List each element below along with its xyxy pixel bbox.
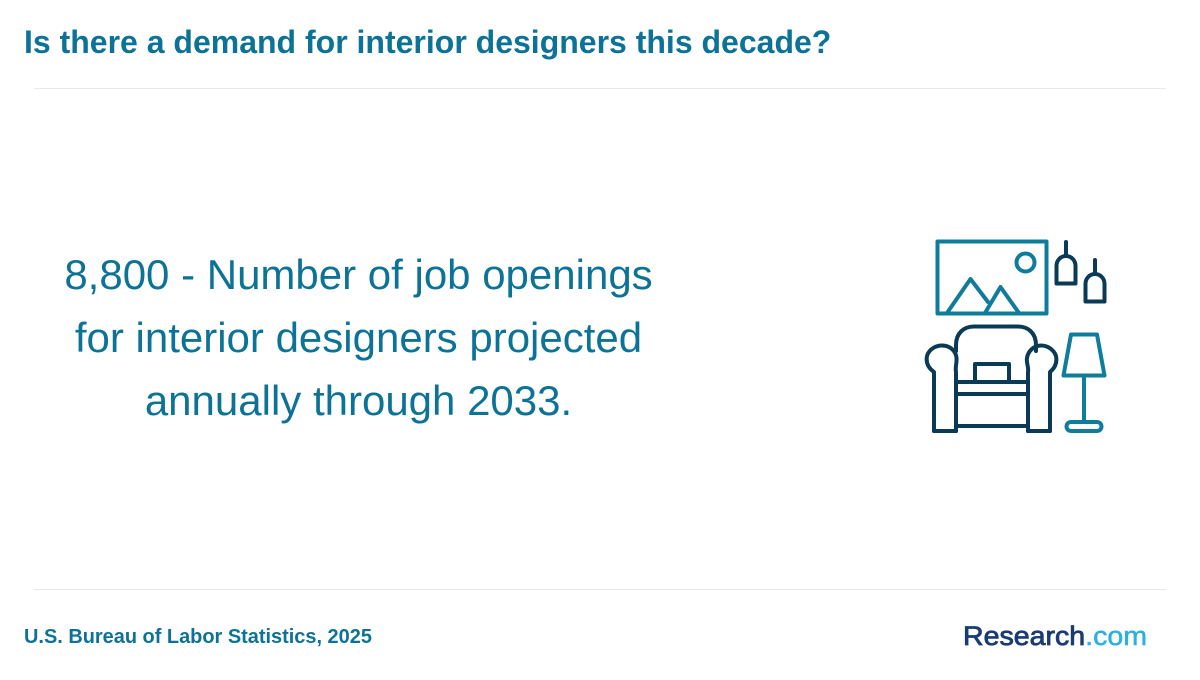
icon: floor lamp [1064, 334, 1104, 431]
source note: U.S. Bureau of Labor Statistics, 2025 [24, 626, 372, 648]
main statistic text: annually through 2033. [145, 377, 572, 424]
main statistic text [64, 251, 653, 424]
icon: armchair [927, 326, 1056, 431]
main statistic text: for interior designers projected [75, 314, 642, 361]
icon: living room with armchair, picture, pendant lights and floor lamp [924, 240, 1106, 433]
title: Is there a demand for interior designers this decade? [24, 24, 831, 60]
logo: Research.com: Research .com [963, 621, 1147, 651]
icon: framed picture [938, 242, 1046, 314]
icon: pendant lights [1056, 242, 1104, 302]
main statistic text: 8,800 - Number of job openings [64, 251, 653, 298]
